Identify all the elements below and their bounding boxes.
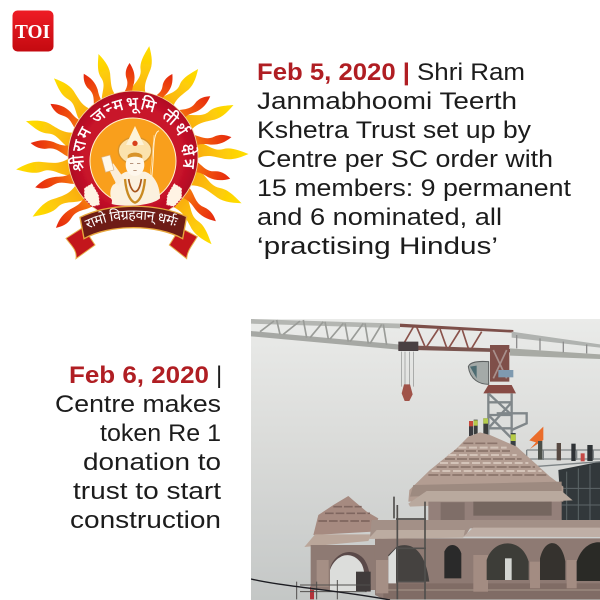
text block: Feb 5, 2020: ‘practising Hindus’ xyxy=(257,233,498,260)
text block: Feb 5, 2020: Shri Ram xyxy=(417,59,525,86)
red medallion xyxy=(68,91,198,221)
workers xyxy=(310,418,593,599)
ribbon xyxy=(65,206,198,260)
text block: Feb 5, 2020: Janmabhoomi Teerth xyxy=(257,88,517,115)
scaffolding platform xyxy=(527,450,600,522)
text block: Feb 6, 2020: construction xyxy=(70,507,221,534)
text block: Feb 5, 2020: Centre per SC order with xyxy=(257,146,553,173)
deity figure xyxy=(102,126,160,206)
text block: Feb 5, 2020: Feb 5, 2020 | xyxy=(257,59,410,86)
floral ornament right xyxy=(166,183,182,207)
trust emblem xyxy=(16,46,248,260)
text block: Feb 6, 2020: Centre makes xyxy=(55,391,221,418)
photo: temple construction under crane xyxy=(251,319,600,600)
orange inner circle xyxy=(90,118,176,204)
upper wall xyxy=(428,502,562,520)
text block: Feb 6, 2020: donation to xyxy=(83,449,221,476)
text block: Feb 6, 2020: Feb 6, 2020 xyxy=(69,362,209,389)
flag xyxy=(529,427,543,449)
text block: Feb 6, 2020: trust to start xyxy=(73,478,221,505)
sun flames xyxy=(15,45,249,248)
TOI logo xyxy=(12,10,54,52)
medallion Hindi lettering xyxy=(84,109,184,171)
main shikhara xyxy=(408,432,573,507)
text block: Feb 5, 2020 xyxy=(257,59,571,260)
crane xyxy=(251,319,600,452)
crane hook xyxy=(402,352,413,401)
text block: Feb 6, 2020 xyxy=(55,362,222,534)
lower scaffold xyxy=(297,497,426,599)
floral ornament left xyxy=(84,183,100,207)
ribbon: रामो विग्रहवान् धर्मः xyxy=(84,208,178,228)
overhead cable xyxy=(251,579,390,600)
text block: Feb 6, 2020: | xyxy=(216,362,222,389)
text block: Feb 5, 2020: Kshetra Trust set up by xyxy=(257,117,531,144)
arches xyxy=(330,542,600,592)
text block: Feb 5, 2020: 15 members: 9 permanent xyxy=(257,175,571,202)
text block: Feb 5, 2020: and 6 nominated, all xyxy=(257,204,502,231)
TOI logo: TOI xyxy=(15,22,50,43)
trust emblem: श्रीराम जन्मभूमि तीर्थ क्षेत्र xyxy=(68,95,198,172)
small shikhara xyxy=(304,496,378,547)
text block: Feb 6, 2020: token Re 1 xyxy=(100,420,221,447)
lower storey xyxy=(311,520,600,599)
